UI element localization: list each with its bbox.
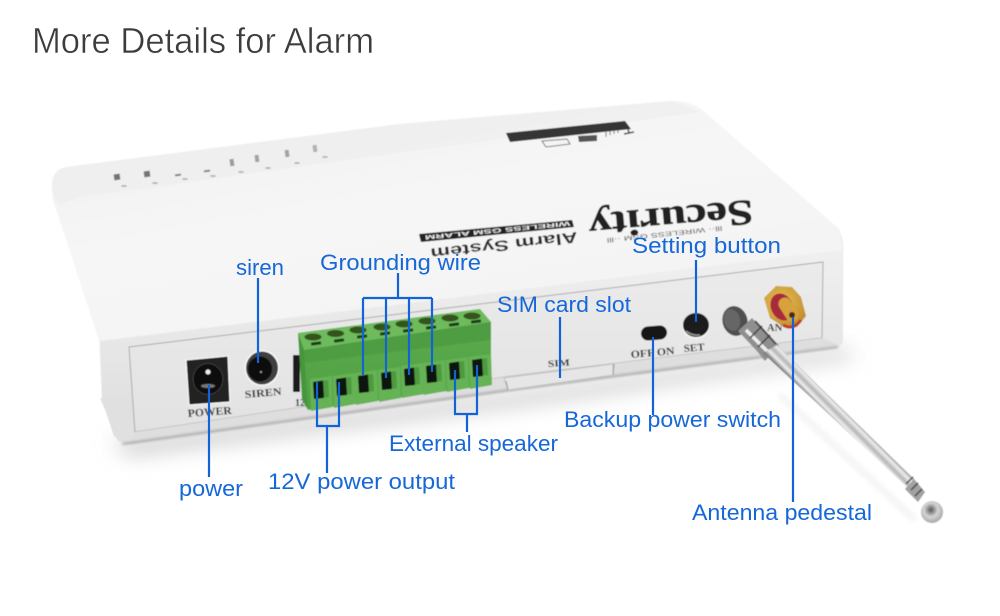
callout: backup power switch: Backup power switch <box>564 407 781 432</box>
badge: wireless GSM alarm <box>419 220 574 242</box>
callout: external speaker: External speaker <box>389 431 558 456</box>
port label: OFF ON: OFF ON <box>630 346 676 361</box>
front face <box>100 250 843 444</box>
port label: SET: SET <box>683 342 705 355</box>
LED indicators <box>121 156 328 187</box>
terminal top face <box>298 309 491 350</box>
terminal block <box>298 309 492 411</box>
antenna rod <box>763 345 915 487</box>
antenna connector <box>764 286 806 327</box>
setting button <box>682 313 710 339</box>
rear panel <box>129 262 823 432</box>
display window <box>506 121 631 142</box>
callout: setting button: Setting button <box>632 233 781 258</box>
callout: external speaker <box>389 365 558 456</box>
LED labels <box>114 145 317 180</box>
backup power switch <box>640 325 668 341</box>
callout: SIM card slot <box>497 292 631 378</box>
device body <box>52 101 843 444</box>
terminal screw holes <box>304 312 480 340</box>
port label: POWER: POWER <box>187 405 233 420</box>
callout: antenna pedestal: Antenna pedestal <box>692 500 872 525</box>
callout: power: power <box>179 476 243 501</box>
callout: grounding wire <box>320 250 481 378</box>
port: power jack <box>186 356 230 405</box>
tagline: wireless GSM: lll·· WIRELESS GSM ··lll <box>606 224 723 243</box>
status icons <box>542 129 634 147</box>
brand: Security: Security <box>587 192 755 246</box>
bottom edge <box>122 347 838 444</box>
SIM card door <box>504 364 614 390</box>
callout: siren: siren <box>236 255 284 280</box>
antenna rod shadow <box>780 395 915 520</box>
antenna collar <box>738 318 779 361</box>
badge: wireless GSM alarm: WIRELESS GSM ALARM <box>424 220 570 239</box>
port: siren jack <box>244 350 280 386</box>
telescopic antenna <box>719 303 943 523</box>
terminal wire slots <box>310 354 492 411</box>
callout: siren <box>236 255 284 363</box>
bottom lip <box>130 338 838 444</box>
device: alarm unit <box>52 101 943 523</box>
port label: ANT: AN <box>767 323 783 334</box>
antenna base <box>719 303 751 339</box>
port label: 12V: 12 <box>295 398 305 409</box>
callout: 12V power output <box>268 382 455 494</box>
callout: 12V power output: 12V power output <box>268 469 455 494</box>
callout: grounding wire: Grounding wire <box>320 250 481 275</box>
title: More Details for Alarm <box>32 20 374 61</box>
brand: Alarm System: Alarm System <box>429 228 578 262</box>
callout: SIM card slot: SIM card slot <box>497 292 631 317</box>
port label: SIREN: SIREN <box>244 387 283 401</box>
port label: SIM: SIM <box>548 358 570 370</box>
antenna tip <box>921 501 943 523</box>
callout: power <box>179 385 243 501</box>
top surface <box>52 101 842 341</box>
device shadow <box>110 348 855 456</box>
